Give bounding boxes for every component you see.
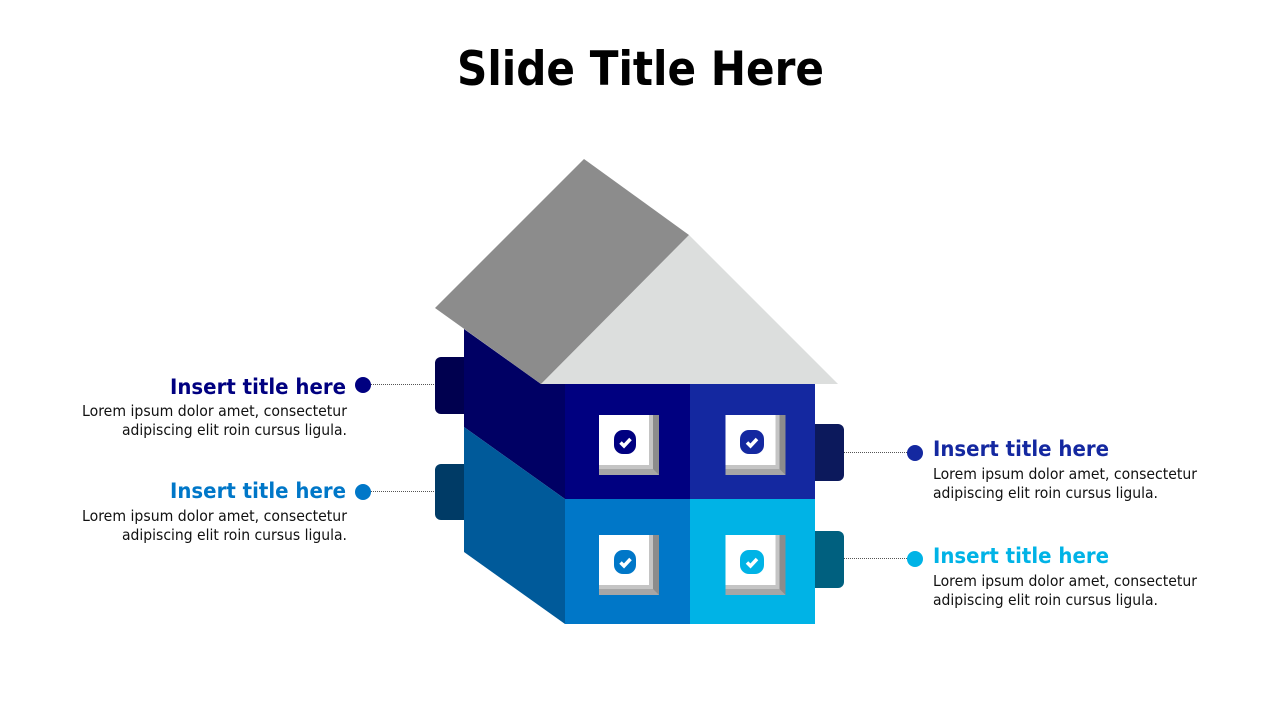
callout: upper right (844, 437, 1198, 502)
tab: lower right (804, 531, 844, 588)
window: bottom left (599, 535, 659, 595)
tab: upper left (435, 357, 475, 414)
callout: lower left: Insert title here (170, 479, 346, 503)
front panel: bottom right (690, 499, 815, 624)
callout: upper right: Insert title here (933, 437, 1109, 461)
window: top left (599, 415, 659, 475)
callout: lower right: Lorem ipsum dolor amet, consectetur (933, 572, 1198, 590)
callout: upper left: Lorem ipsum dolor amet, consectetur (82, 402, 348, 420)
callout: lower left: adipiscing elit roin cursus ligula. (122, 526, 347, 544)
side wall: upper (464, 329, 565, 499)
title: Slide Title Here (457, 42, 824, 97)
callout: upper left: adipiscing elit roin cursus ligula. (122, 421, 347, 439)
front panel: top left (565, 384, 690, 499)
roof: slope (435, 159, 689, 384)
callout: upper right: adipiscing elit roin cursus ligula. (933, 484, 1158, 502)
callout: lower right: Insert title here (933, 544, 1109, 568)
side wall: lower (464, 427, 565, 624)
front panel: top right (690, 384, 815, 499)
window: top right (726, 415, 786, 475)
house illustration (435, 159, 844, 624)
callout: lower left: Lorem ipsum dolor amet, consectetur (82, 507, 348, 525)
callout: lower right: adipiscing elit roin cursus ligula. (933, 591, 1158, 609)
window: bottom right (726, 535, 786, 595)
front panel: bottom left (565, 499, 690, 624)
callout: lower right (844, 544, 1198, 609)
roof: gable (541, 235, 838, 384)
callout: lower left (82, 479, 435, 544)
callout: upper left: Insert title here (170, 375, 346, 399)
callout: upper left (82, 375, 435, 439)
callout: upper right: Lorem ipsum dolor amet, consectetur (933, 465, 1198, 483)
tab: lower left (435, 464, 475, 520)
tab: upper right (804, 424, 844, 481)
